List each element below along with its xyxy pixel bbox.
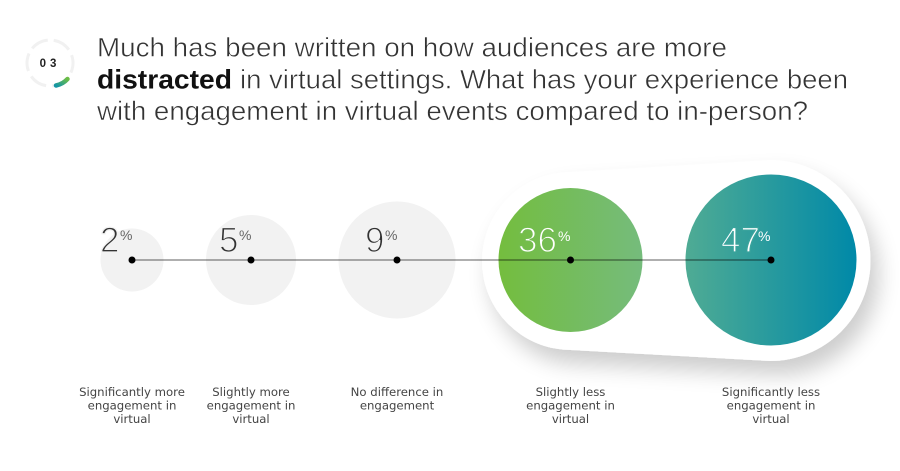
label: slightly less: Slightly less (536, 385, 605, 399)
label: significantly less: Significantly less (722, 385, 820, 399)
label: no difference: No difference in (351, 385, 443, 399)
label: slightly less: virtual (552, 412, 589, 426)
data points (128, 256, 774, 264)
label: significantly more: Significantly more (79, 385, 185, 399)
value: 36%: 36 (518, 221, 557, 260)
label: significantly more: engagement in (88, 398, 176, 412)
label: no difference: engagement (360, 398, 435, 412)
title: with engagement in virtual events compared to in-person? (96, 96, 808, 126)
value: 2%: 2 (100, 221, 119, 260)
highlight panel with shadow (482, 160, 870, 361)
connecting line (132, 259, 771, 261)
value: 9% (365, 221, 397, 260)
label: significantly less: engagement in (727, 398, 815, 412)
icon: question number progress ring (23, 36, 77, 90)
label: slightly less: engagement in (526, 398, 615, 412)
icon: question number progress ring: 03 (40, 58, 60, 70)
bubble: 36 percent (498, 188, 642, 332)
label: slightly more: engagement in (207, 398, 295, 412)
bubble chart (100, 174, 856, 346)
value: 47%: 47 (721, 221, 760, 260)
bubble: 47 percent (686, 174, 856, 346)
value: 2% (100, 221, 132, 260)
value: 47%: % (758, 228, 770, 244)
value: 5% (219, 221, 251, 260)
label: significantly more: virtual (113, 412, 151, 426)
value: 9%: 9 (365, 221, 384, 260)
value: 36%: % (558, 228, 570, 244)
value: 2%: % (120, 227, 132, 243)
value: 9%: % (385, 227, 397, 243)
bubble: 9 percent (338, 202, 456, 318)
label: significantly less: virtual (752, 412, 790, 426)
value: 5%: % (239, 227, 251, 243)
bubble: 2 percent (100, 228, 164, 292)
bubble: 5 percent (206, 215, 296, 305)
title: in virtual settings. What has your experience been (240, 64, 848, 94)
title: distracted (97, 64, 232, 94)
value: 5%: 5 (219, 221, 238, 260)
label: slightly more: virtual (232, 412, 270, 426)
label: slightly more: Slightly more (212, 385, 290, 399)
title: Much has been written on how audiences are more (97, 32, 727, 62)
title (96, 32, 848, 126)
